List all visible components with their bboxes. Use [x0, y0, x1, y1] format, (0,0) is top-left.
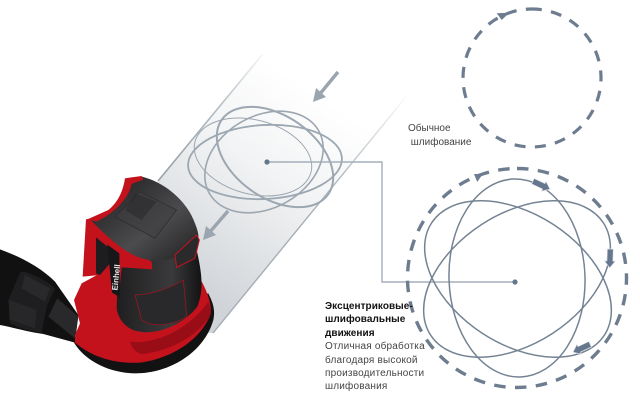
brand label	[107, 245, 122, 297]
sanding surface band	[120, 55, 410, 333]
text block: eccentric sanding description: благодаря высокой	[325, 355, 418, 366]
sander body	[117, 250, 202, 332]
arrow: orbit right	[604, 249, 616, 268]
arrow: lower direction on band	[203, 211, 228, 240]
diagram: ordinary sanding dashed circle	[462, 8, 602, 148]
label: ordinary sanding: Обычное	[408, 123, 451, 134]
arrow: upper direction on band	[313, 72, 338, 102]
text block: eccentric sanding description: Эксцентриковые-	[325, 301, 413, 312]
red side panel	[83, 217, 152, 294]
top accent switch	[175, 235, 199, 267]
text block: eccentric sanding description: производительности	[325, 368, 424, 379]
text block: eccentric sanding description: шлифовальные	[325, 314, 405, 325]
red skirt	[74, 273, 211, 363]
arrow: orbit bottom right	[571, 339, 592, 357]
text block: eccentric sanding description: движения	[325, 328, 375, 339]
connector line from surface pattern to enlarged pattern	[264, 159, 518, 285]
text block: eccentric sanding description: Отличная обработка	[325, 341, 425, 352]
sander handle	[0, 249, 78, 343]
product: orbital sander	[0, 176, 214, 373]
top cap	[90, 177, 199, 261]
arrow: orbit top right	[531, 176, 552, 194]
brand label: Einhell	[110, 264, 122, 291]
eccentric orbit pattern on surface	[185, 86, 352, 233]
label: ordinary sanding: шлифование	[411, 137, 471, 148]
label: ordinary sanding	[408, 123, 471, 148]
sanding pad	[74, 293, 214, 373]
diagram: eccentric sanding enlarged orbits	[395, 168, 640, 390]
text block: eccentric sanding description: шлифования	[325, 381, 388, 392]
text block: eccentric sanding description	[325, 301, 425, 392]
